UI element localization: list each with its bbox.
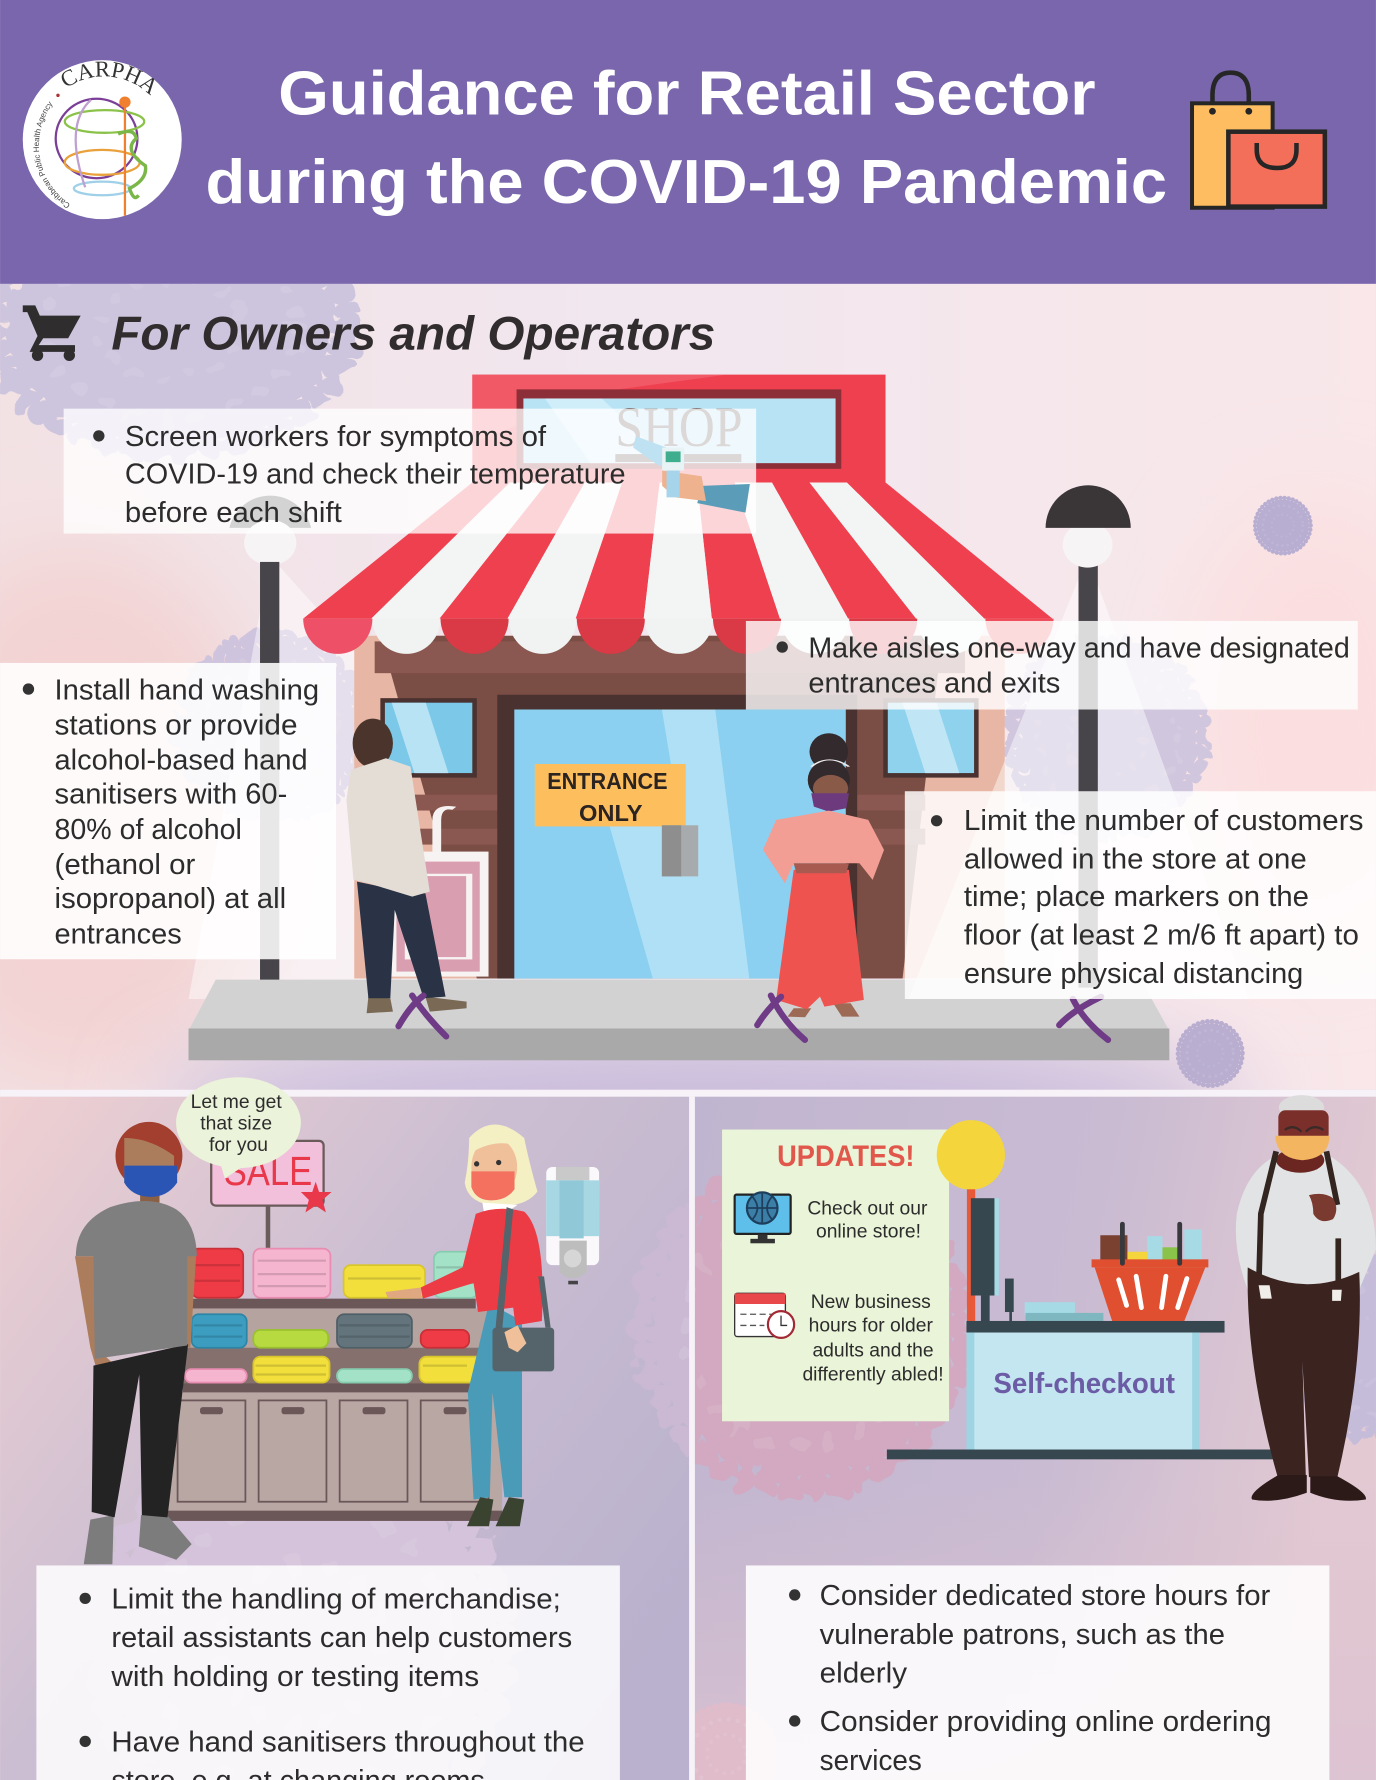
- text: limit customers: time; place markers on the: [964, 881, 1309, 913]
- text: screen workers: COVID-19 and check their temperature: [125, 459, 626, 491]
- title: Guidance for Retail Sector: [278, 59, 1096, 129]
- virus: lower right: [1178, 1021, 1242, 1085]
- heading: For Owners and Operators: For Owners and Operators: [111, 308, 715, 361]
- icon: thermometer in hand: [633, 436, 750, 513]
- illustration: speech bubble: that size: [200, 1114, 272, 1135]
- illustration: sale sign: SALE: [224, 1148, 312, 1194]
- illustration: sale sign: [211, 1141, 332, 1249]
- icon: sanitiser dispenser: [546, 1167, 599, 1284]
- panel: updates board: New business: [811, 1292, 931, 1313]
- text: store hours advice: [789, 1580, 1271, 1777]
- text: merchandise advice: with holding or testing items: [110, 1661, 479, 1693]
- text: limit customers: floor (at least 2 m/6 ft apart) to: [964, 919, 1359, 951]
- text: store hours advice: elderly: [820, 1657, 908, 1689]
- illustration: clothes rack: [390, 808, 489, 977]
- panel: updates board: [722, 1130, 949, 1421]
- callout box: screen workers: [64, 409, 756, 534]
- text: store hours advice: Consider providing online ordering: [820, 1706, 1271, 1738]
- text: screen workers: [93, 421, 626, 529]
- awning: [303, 482, 1054, 654]
- panel: bottom left background: [0, 1096, 689, 1780]
- illustration: street lamp left: [189, 496, 522, 999]
- header band: [0, 0, 1376, 284]
- text: hand washing: (ethanol or: [55, 849, 196, 881]
- divider lines: [0, 1090, 1376, 1780]
- sign: entrance only: ONLY: [579, 800, 643, 826]
- text: hand washing: stations or provide: [55, 709, 297, 741]
- logo: CARPHA: Caribbean Public Health Agency: [33, 102, 70, 208]
- markers: floor X: [399, 996, 1108, 1040]
- icon: monitor with globe: [735, 1192, 791, 1243]
- virus: centre edge left panel: [626, 1223, 689, 1464]
- icon: shopping bags: [1192, 73, 1325, 208]
- panel: updates board: UPDATES!: [777, 1140, 914, 1173]
- text: merchandise advice: retail assistants can help customers: [111, 1622, 572, 1654]
- virus: behind shopper: [1288, 1266, 1376, 1436]
- panel: updates board: adults and the: [812, 1341, 934, 1362]
- illustration: self-checkout counter: [887, 1120, 1278, 1459]
- text: merchandise advice: [80, 1584, 585, 1780]
- illustration: speech bubble: [176, 1077, 301, 1178]
- illustration: street lamp right: [908, 485, 1249, 999]
- text: screen workers: Screen workers for symptoms of: [125, 421, 547, 453]
- text: limit customers: ensure physical distancing: [964, 958, 1303, 990]
- icon: cart: [23, 305, 81, 361]
- text: merchandise advice: Have hand sanitisers throughout the: [111, 1727, 585, 1759]
- panel: updates board: differently abled!: [802, 1364, 944, 1385]
- wall: [354, 636, 1005, 979]
- left window: [380, 698, 477, 778]
- panel: updates board: hours for older: [809, 1316, 934, 1337]
- text: hand washing: 80% of alcohol: [55, 814, 242, 846]
- callout box: merchandise advice: [36, 1565, 620, 1780]
- panel: store scene background: [0, 284, 1376, 1090]
- illustration: speech bubble: Let me get: [191, 1092, 282, 1113]
- text: hand washing: [23, 674, 319, 950]
- panel: updates board: online store!: [816, 1221, 921, 1242]
- text: one-way aisles: Make aisles one-way and have designated: [808, 632, 1350, 664]
- text: store hours advice: services: [820, 1745, 922, 1777]
- illustration: sidewalk: [189, 980, 1169, 1060]
- callout box: hand washing: [0, 663, 336, 959]
- basket of groceries: [1092, 1222, 1208, 1321]
- virus: behind right text: [1004, 710, 1213, 792]
- text: merchandise advice: Limit the handling of merchandise;: [111, 1584, 561, 1616]
- illustration: woman with purple mask: [763, 733, 884, 1017]
- illustration: clothing display: [167, 1249, 502, 1521]
- title: [206, 59, 1167, 217]
- illustration: man with blue mask: [75, 1122, 197, 1564]
- text: hand washing: alcohol-based hand: [55, 745, 308, 777]
- illustration: older man with yellow mask: [1236, 1095, 1376, 1501]
- text: store hours advice: vulnerable patrons, such as the: [820, 1619, 1225, 1651]
- shop sign: [472, 375, 886, 494]
- virus: behind updates board: [695, 1176, 967, 1502]
- text: hand washing: sanitisers with 60-: [55, 779, 287, 811]
- icon: calendar and clock: [735, 1293, 794, 1338]
- virus: lower left: [98, 1494, 496, 1566]
- illustration: shop front: [303, 375, 1054, 979]
- virus: small right: [1255, 498, 1311, 553]
- text: hand washing: entrances: [55, 918, 182, 950]
- text: limit customers: allowed in the store at one: [964, 843, 1307, 875]
- illustration: shopper from behind: [346, 719, 467, 1013]
- text: hand washing: isopropanol) at all: [55, 883, 286, 915]
- illustration: speech bubble: for you: [209, 1135, 268, 1156]
- door: [497, 695, 857, 979]
- virus: large top left: [0, 284, 364, 465]
- panel: bottom right background: [641, 1097, 1376, 1780]
- logo: CARPHA: [22, 60, 182, 220]
- door handle: [662, 825, 698, 876]
- sign: entrance only: ENTRANCE: [547, 768, 668, 794]
- text: one-way aisles: [777, 632, 1350, 699]
- virus: behind left lamp: [196, 627, 354, 804]
- right window: [883, 698, 979, 778]
- text: hand washing: Install hand washing: [55, 674, 319, 706]
- text: screen workers: before each shift: [125, 497, 342, 529]
- shop sign: SHOP: [615, 396, 742, 459]
- callout box: store hours advice: [746, 1565, 1329, 1780]
- text: one-way aisles: entrances and exits: [808, 667, 1060, 699]
- title: during the COVID-19 Pandemic: [206, 147, 1167, 217]
- panel: updates board: Check out our: [807, 1199, 928, 1220]
- text: limit customers: Limit the number of customers: [964, 805, 1363, 837]
- callout box: one-way aisles: [746, 621, 1358, 710]
- callout box: limit customers: [905, 791, 1376, 999]
- illustration: self-checkout counter: Self-checkout: [993, 1368, 1176, 1400]
- illustration: woman shop assistant: [385, 1125, 554, 1526]
- logo: CARPHA: CARPHA: [62, 62, 154, 96]
- virus: bottom left of right panel: [695, 1702, 746, 1780]
- text: store hours advice: Consider dedicated store hours for: [820, 1580, 1271, 1612]
- sign: entrance only: [535, 764, 686, 826]
- text: limit customers: [931, 805, 1363, 990]
